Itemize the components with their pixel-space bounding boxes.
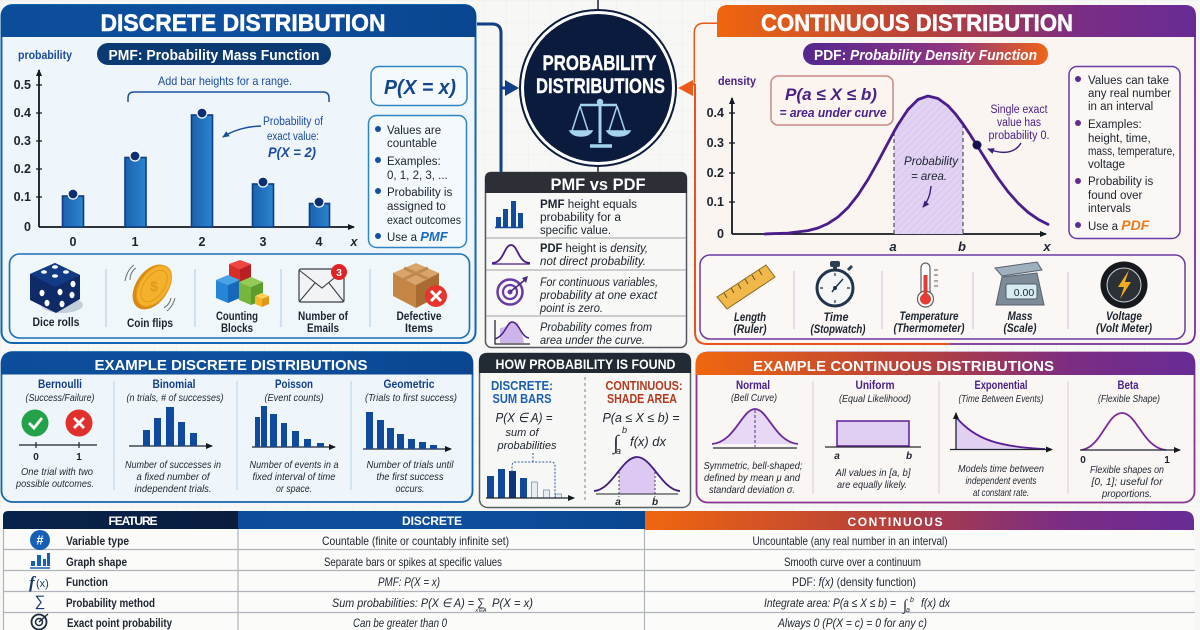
row: target point probability: point is zero. — [539, 303, 603, 315]
annotation: probability of exact value: exact value: — [267, 131, 319, 143]
row: function: f — [29, 573, 37, 592]
icon: counting blocks: Blocks — [221, 323, 253, 335]
icon: dice rolls: Dice rolls — [32, 317, 80, 329]
row: probability method: Integrate area: P(a ≤ X ≤ b) = — [764, 596, 896, 610]
table header: discrete: DISCRETE — [402, 514, 462, 528]
example: Beta: Flexible shapes on — [1090, 464, 1164, 476]
icon: mass scale: 0.00 — [1014, 287, 1034, 299]
chart: PMF bar chart: 0.5 — [14, 78, 31, 92]
bullet list: continuous properties: in an interval — [1088, 101, 1153, 113]
pill: PDF label: PDF: Probability Density Function — [814, 47, 1037, 64]
row: variable type — [30, 530, 948, 550]
bullet list: continuous properties: voltage — [1088, 159, 1125, 171]
annotation: add bar heights bracket: Add bar heights for a range. — [158, 74, 292, 88]
icon: thermometer — [894, 263, 965, 335]
example: Bernoulli: 0 — [33, 452, 39, 463]
icon: voltmeter: (Volt Meter) — [1096, 323, 1152, 335]
chart: PMF bar chart: probability — [18, 48, 72, 62]
icon: ruler — [717, 265, 775, 336]
annotation: probability of exact value: P(X = 2) — [268, 144, 316, 160]
row: function: PDF: f(x) (density function) — [792, 575, 916, 589]
row: area under curve: area under the curve. — [540, 335, 645, 347]
icon: balance scale — [570, 99, 630, 146]
heading: discrete distribution: DISCRETE DISTRIBUTION — [100, 10, 386, 37]
example: Binomial: (n trials, # of successes) — [126, 392, 224, 404]
panel: discrete examples icons — [10, 254, 470, 338]
example: Beta: 1 — [1164, 455, 1170, 466]
column: discrete sum bars — [486, 378, 574, 498]
row: area under curve: Probability comes from — [540, 322, 652, 334]
row: PDF height: PDF height is density, — [540, 243, 648, 255]
icon: mass scale: Mass — [1008, 311, 1032, 323]
example: Normal: standard deviation σ. — [709, 484, 795, 496]
example: Poisson: fixed interval of time — [252, 471, 336, 483]
row: probability method: a — [906, 607, 910, 614]
chart: PDF density curve: 0.2 — [707, 166, 724, 180]
example: Binomial: independent trials. — [134, 483, 212, 495]
bullet list: discrete properties: Probability is — [387, 187, 452, 199]
column: continuous shade area: ∫ — [611, 432, 620, 455]
bullet list: continuous properties: Probability is — [1088, 176, 1153, 188]
icon: counting blocks — [216, 260, 269, 335]
example: Binomial: a fixed number of — [136, 471, 210, 483]
panel: continuous examples icons — [700, 255, 1185, 339]
column: continuous shade area: a — [615, 497, 621, 508]
example: Geometric: (Trials to first success) — [365, 392, 457, 404]
example: Beta — [1080, 380, 1180, 500]
chart: PDF density curve: b — [958, 239, 966, 254]
formula box: P(X = x): P(X = x) — [384, 77, 456, 99]
comparison table — [3, 511, 1195, 630]
bullet list: discrete properties: Use a PMF — [387, 229, 449, 244]
example: Uniform: Uniform — [856, 380, 894, 392]
formula box: area under curve: P(a ≤ X ≤ b) — [785, 85, 877, 104]
icon: defective items — [393, 263, 447, 335]
title badge: probability distributions — [520, 0, 676, 172]
example: Binomial: Number of successes in — [125, 459, 221, 471]
row: exact point probability: Can be greater than 0 — [353, 616, 447, 630]
annotation: add bar heights bracket — [128, 74, 329, 102]
example: Normal: defined by mean μ and — [704, 472, 801, 484]
example: Beta: Beta — [1118, 380, 1139, 392]
annotation: single exact value: probability 0. — [988, 130, 1050, 142]
heading: continuous distribution — [717, 5, 1196, 37]
example: Uniform: b — [906, 451, 912, 462]
panel: continuous distribution — [695, 5, 1196, 344]
heading: PMF vs PDF — [485, 172, 687, 194]
heading: example discrete distributions: EXAMPLE DISCRETE DISTRIBUTIONS — [94, 357, 368, 374]
chart: PDF density curve: 0.1 — [707, 195, 724, 209]
bullet list: discrete properties: assigned to — [387, 201, 446, 213]
row: probability method: x∈A — [474, 608, 487, 614]
column: continuous shade area: a — [616, 446, 621, 456]
column: continuous shade area — [594, 378, 682, 508]
row: graph shape: Separate bars or spikes at specific values — [324, 555, 502, 569]
column: continuous shade area: f(x) dx — [630, 434, 666, 449]
row: probability method: ∑ — [35, 593, 45, 610]
example: Beta: proportions. — [1101, 488, 1152, 500]
example: Normal: Normal — [736, 380, 770, 392]
example: Exponential: independent events — [966, 475, 1037, 487]
formula box: P(X = x) — [371, 66, 467, 106]
icon: counting blocks: Counting — [216, 311, 258, 323]
chart: PDF density curve: a — [889, 239, 897, 254]
chart: PMF bar chart: 2 — [199, 235, 206, 249]
bullet list: continuous properties: any real number — [1088, 88, 1171, 100]
column: discrete sum bars: SUM BARS — [492, 391, 552, 406]
table header: feature — [3, 511, 238, 529]
formula box: area under curve: = area under curve — [780, 106, 887, 120]
chart: PDF density curve: density — [718, 74, 756, 88]
chart: PDF density curve: 0.4 — [707, 106, 724, 120]
chart: PDF density curve: 0.3 — [707, 136, 724, 150]
example: Geometric: occurs. — [396, 483, 424, 495]
pill: PMF label: PMF: Probability Mass Function — [108, 47, 320, 64]
example: Exponential: Models time between — [958, 463, 1044, 475]
icon: defective items: Defective — [396, 311, 442, 323]
row: target point probability: probability at one exact — [539, 290, 658, 302]
row: variable type: # — [36, 532, 44, 548]
example: Bernoulli: One trial with two — [21, 466, 93, 478]
heading: how probability is found: HOW PROBABILITY IS FOUND — [496, 356, 676, 372]
bullet list: continuous properties: mass, temperature, — [1088, 146, 1175, 158]
icon: defective items: Items — [405, 323, 433, 335]
example: Poisson: or space. — [276, 483, 312, 495]
icon: number of emails — [298, 264, 348, 335]
example: Uniform: are equally likely. — [837, 479, 907, 491]
bullet list: continuous properties: intervals — [1088, 203, 1131, 215]
column: continuous shade area: b — [652, 497, 658, 508]
icon: coin flips: $ — [150, 278, 158, 294]
example: Beta: [0, 1]; useful for — [1091, 476, 1163, 488]
row: PDF height: not direct probability. — [540, 256, 646, 268]
title badge: probability distributions: DISTRIBUTIONS — [536, 75, 665, 98]
row: exact point probability: Exact point probability — [67, 616, 172, 630]
chart: PMF bar chart — [14, 48, 359, 249]
example: Normal: (Bell Curve) — [731, 392, 777, 404]
example: Uniform: a — [834, 451, 840, 462]
row: target point probability — [498, 276, 658, 315]
example: Exponential: Exponential — [974, 380, 1028, 392]
row: probability method: Probability method — [66, 596, 155, 610]
table header: feature: FEATURE — [108, 514, 158, 528]
icon: number of emails: Number of — [298, 311, 348, 323]
row: exact point probability: Always 0 (P(X = c) = 0 for any c) — [777, 616, 927, 630]
example: Poisson — [250, 379, 339, 495]
bullet list: continuous properties: found over — [1088, 190, 1143, 202]
row: area under curve — [495, 320, 652, 347]
row: PMF height: probability for a — [540, 212, 622, 224]
chart: PDF density curve: x — [1042, 239, 1051, 254]
chart: PMF bar chart: 0 — [24, 220, 31, 234]
row: probability method: ∫ — [902, 598, 909, 614]
example: Exponential — [950, 380, 1052, 499]
bullet list: continuous properties: Examples: — [1088, 119, 1142, 131]
row: probability method: ∑ — [477, 597, 485, 609]
example: Binomial: Binomial — [152, 379, 196, 391]
icon: thermometer: Temperature — [900, 311, 959, 323]
icon: thermometer: (Thermometer) — [894, 323, 965, 335]
example: Bernoulli: possible outcomes. — [15, 478, 94, 490]
chart: PDF density curve: Probability — [904, 156, 959, 168]
row: variable type: Variable type — [66, 534, 129, 548]
row: probability method: Sum probabilities: P(X ∈ A) = — [332, 596, 474, 610]
chart: PMF bar chart: 0.4 — [14, 106, 31, 120]
icon: mass scale: (Scale) — [1004, 323, 1037, 335]
annotation: probability of exact value — [223, 116, 324, 160]
annotation: single exact value: value has — [997, 117, 1041, 129]
row: probability method — [35, 593, 951, 614]
chart: PMF bar chart: 0.3 — [14, 134, 31, 148]
chart: PMF bar chart: 0 — [70, 235, 77, 249]
chart: PMF bar chart: 3 — [260, 235, 267, 249]
column: discrete sum bars: P(X ∈ A) = — [496, 410, 553, 425]
row: probability method: f(x) dx — [921, 596, 951, 610]
icon: ruler: Length — [734, 312, 766, 324]
icon: voltmeter — [1096, 262, 1152, 335]
column: continuous shade area: SHADE AREA — [607, 391, 677, 406]
bullet list: continuous properties: Values can take — [1088, 75, 1169, 87]
row: PDF height — [492, 243, 648, 268]
row: function: Function — [66, 575, 108, 589]
row: PMF height: specific value. — [540, 225, 611, 237]
row: target point probability: For continuous variables, — [540, 277, 658, 289]
chart: PDF density curve — [707, 74, 1051, 254]
example: Poisson: Poisson — [275, 379, 313, 391]
heading: example continuous distributions: EXAMPLE CONTINUOUS DISTRIBUTIONS — [753, 358, 1054, 375]
row: probability method: b — [910, 597, 914, 604]
example: Poisson: (Event counts) — [264, 392, 324, 404]
chart: PMF bar chart: 0.2 — [14, 162, 31, 176]
icon: mass scale — [995, 262, 1044, 335]
bullet list: discrete properties: Values are — [387, 125, 441, 137]
example: Bernoulli: (Success/Failure) — [26, 392, 94, 404]
heading: example continuous distributions — [696, 352, 1195, 375]
connector: discrete panel to centre — [477, 24, 519, 172]
example: Bernoulli: Bernoulli — [38, 379, 82, 391]
icon: number of emails: 3 — [336, 267, 342, 279]
column: discrete sum bars: DISCRETE: — [491, 378, 553, 393]
icon: stopwatch: (Stopwatch) — [810, 324, 866, 336]
bullet list: discrete properties: 0, 1, 2, 3, ... — [387, 170, 448, 182]
row: graph shape: Graph shape — [66, 555, 127, 569]
row: function: (x) — [36, 578, 49, 590]
bullet list: discrete properties — [368, 116, 466, 248]
bullet list: continuous properties — [1069, 66, 1180, 238]
annotation: single exact value — [972, 104, 1050, 152]
example: Uniform: (Equal Likelihood) — [839, 393, 911, 405]
panel: discrete distribution — [1, 5, 476, 343]
bullet list: discrete properties: countable — [387, 138, 437, 150]
icon: coin flips: Coin flips — [127, 318, 173, 330]
icon: number of emails: Emails — [307, 323, 339, 335]
example: Normal — [704, 380, 803, 496]
table header: discrete — [238, 511, 645, 529]
chart: PMF bar chart: 0.1 — [14, 190, 31, 204]
example: Normal: Symmetric, bell-shaped; — [704, 460, 803, 472]
column: discrete sum bars: probabilities — [496, 440, 557, 452]
example: Geometric: Geometric — [384, 379, 435, 391]
heading: continuous distribution: CONTINUOUS DISTRIBUTION — [761, 10, 1073, 37]
icon: coin flips — [125, 257, 179, 330]
example: Binomial — [125, 379, 224, 495]
heading: example discrete distributions — [1, 352, 473, 374]
panel: how probability is found — [479, 353, 691, 508]
heading: discrete distribution — [1, 5, 476, 37]
row: PMF height — [495, 199, 637, 237]
example: Geometric: the first success — [376, 471, 444, 483]
title badge: probability distributions: PROBABILITY — [542, 52, 656, 75]
icon: stopwatch — [810, 261, 866, 336]
row: exact point probability — [32, 614, 927, 630]
chart: PDF density curve: = area. — [911, 171, 947, 183]
bullet list: discrete properties: exact outcomes — [387, 215, 461, 227]
example: Beta: 0 — [1080, 455, 1086, 466]
panel: example continuous distributions — [696, 352, 1195, 502]
chart: PMF bar chart: 4 — [316, 235, 323, 249]
row: graph shape — [30, 553, 921, 569]
row: variable type: Countable (finite or countably infinite set) — [322, 534, 509, 548]
column: continuous shade area: b — [622, 425, 627, 435]
example: Exponential: at constant rate. — [973, 487, 1029, 499]
example: Beta: (Flexible Shape) — [1098, 393, 1160, 405]
row: function: PMF: P(X = x) — [378, 575, 440, 589]
table header: continuous: CONTINUOUS — [848, 515, 942, 529]
annotation: single exact value: Single exact — [990, 104, 1048, 116]
icon: voltmeter: Voltage — [1106, 311, 1143, 323]
icon: dice rolls — [30, 263, 83, 329]
icon: stopwatch: Time — [824, 312, 849, 324]
chart: PDF density curve: 0 — [717, 227, 724, 241]
column: continuous shade area: CONTINUOUS: — [606, 378, 682, 393]
row: probability method: P(X = x) — [492, 596, 533, 610]
row: variable type: Uncountable (any real number in an interval) — [752, 534, 948, 548]
column: continuous shade area: P(a ≤ X ≤ b) = — [602, 410, 680, 425]
bullet list: continuous properties: height, time, — [1088, 133, 1151, 145]
example: Uniform: All values in [a, b] — [835, 467, 911, 479]
panel: example discrete distributions — [1, 352, 473, 502]
icon: ruler: (Ruler) — [734, 324, 767, 336]
chart: PMF bar chart: 1 — [132, 235, 139, 249]
row: PMF height: PMF height equals — [540, 199, 637, 211]
connector: continuous panel to centre — [678, 24, 717, 96]
panel: PMF vs PDF — [485, 172, 687, 348]
chart: PMF bar chart: x — [350, 235, 359, 249]
example: Bernoulli — [15, 379, 97, 490]
example: Geometric: Number of trials until — [366, 459, 454, 471]
row: function — [29, 573, 916, 592]
example: Poisson: Number of events in a — [250, 459, 339, 471]
example: Geometric — [363, 379, 457, 495]
example: Exponential: (Time Between Events) — [958, 393, 1044, 405]
annotation: probability of exact value: Probability of — [263, 116, 324, 128]
bullet list: continuous properties: Use a PDF — [1088, 217, 1150, 233]
row: graph shape: Smooth curve over a continuum — [784, 555, 921, 569]
heading: PMF vs PDF: PMF vs PDF — [550, 175, 646, 194]
bullet list: discrete properties: Examples: — [387, 156, 441, 168]
formula box: area under curve — [771, 76, 893, 125]
table header: continuous — [645, 511, 1194, 530]
example: Uniform — [825, 380, 921, 491]
example: Bernoulli: 1 — [76, 452, 82, 463]
column: discrete sum bars: sum of — [506, 427, 539, 439]
